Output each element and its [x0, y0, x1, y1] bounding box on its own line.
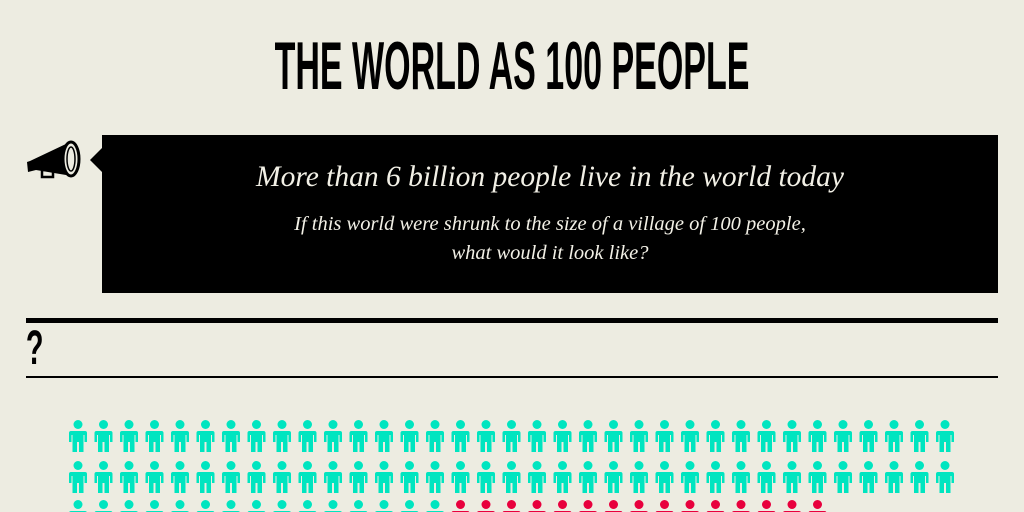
- section header: ?: [26, 322, 43, 375]
- callout: what would it look like?: [451, 242, 648, 264]
- callout: If this world were shrunk to the size of a village of 100 people,: [294, 213, 806, 235]
- title: THE WORLD AS 100 PEOPLE: [275, 28, 749, 104]
- section header: [26, 318, 998, 378]
- icon: megaphone: [27, 140, 80, 178]
- callout: [102, 135, 998, 293]
- callout: More than 6 billion people live in the world today: [256, 161, 844, 193]
